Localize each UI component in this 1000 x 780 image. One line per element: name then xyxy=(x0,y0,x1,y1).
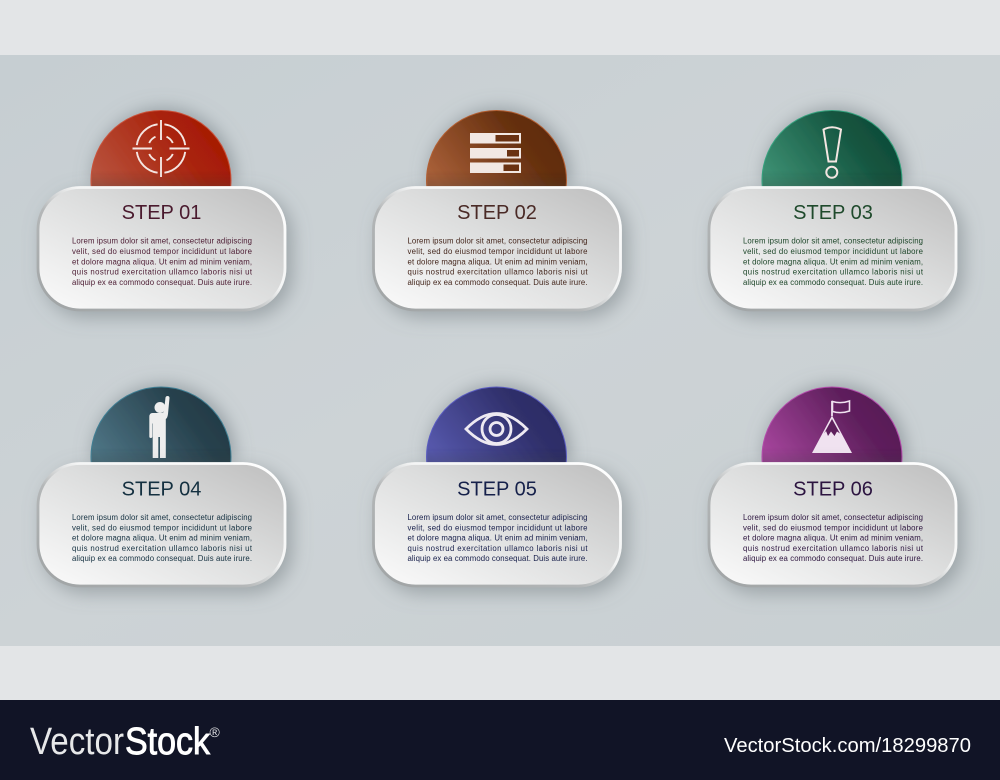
panel: step 02 xyxy=(374,111,620,310)
semicircle: step 02 xyxy=(426,111,566,187)
logo: VectorStock: Stock xyxy=(125,721,211,763)
text block: step 06: Lorem ipsum dolor sit amet, consectetur adipiscing xyxy=(743,513,923,522)
panel: step 04 xyxy=(38,387,285,586)
card: step 05 xyxy=(374,464,620,586)
panel: step 03 xyxy=(709,111,956,310)
icon: person raising arm xyxy=(149,396,170,458)
icon: exclamation mark xyxy=(824,127,841,178)
heading: step 01: STEP 01 xyxy=(122,202,201,224)
footer bar xyxy=(0,700,1000,780)
text block: step 01: Lorem ipsum dolor sit amet, consectetur adipiscing xyxy=(72,236,252,246)
text block: step 05: velit, sed do eiusmod tempor incididunt ut labore xyxy=(408,524,588,532)
text block: step 01 xyxy=(72,236,253,287)
heading: step 04: STEP 04 xyxy=(122,478,201,500)
heading: step 02: STEP 02 xyxy=(457,202,537,224)
semicircle: step 05 xyxy=(426,387,566,464)
text block: step 02 xyxy=(408,236,588,287)
text block: step 04: aliquip ex ea commodo consequat. Duis aute irure. xyxy=(72,554,252,563)
panel: step 05 xyxy=(374,387,620,586)
icon: mountain with flag xyxy=(812,401,852,453)
text block: step 03 xyxy=(743,236,924,287)
text block: step 03: et dolore magna aliqua. Ut enim ad minim veniam, xyxy=(743,258,923,266)
text block: step 04: quis nostrud exercitation ullamco laboris nisi ut xyxy=(72,544,253,553)
text block: step 05: Lorem ipsum dolor sit amet, consectetur adipiscing xyxy=(408,513,588,522)
text block: step 02: velit, sed do eiusmod tempor incididunt ut labore xyxy=(408,247,588,256)
card: step 02 xyxy=(374,188,620,310)
text block: step 06 xyxy=(743,513,924,563)
heading: step 03: STEP 03 xyxy=(793,202,873,224)
semicircle: step 04 xyxy=(91,387,231,464)
text block: step 02: Lorem ipsum dolor sit amet, consectetur adipiscing xyxy=(408,236,588,246)
text block: step 01: velit, sed do eiusmod tempor incididunt ut labore xyxy=(72,247,252,256)
text block: step 06: velit, sed do eiusmod tempor incididunt ut labore xyxy=(743,524,923,532)
text block: step 03: velit, sed do eiusmod tempor incididunt ut labore xyxy=(743,247,923,256)
icon: target xyxy=(132,120,190,177)
text block: step 06: quis nostrud exercitation ullamco laboris nisi ut xyxy=(743,544,924,553)
icon: progress bars xyxy=(470,133,521,173)
card: step 03 xyxy=(709,188,956,310)
text block: step 03: Lorem ipsum dolor sit amet, consectetur adipiscing xyxy=(743,236,923,246)
card: step 06 xyxy=(709,464,956,586)
heading: step 05: STEP 05 xyxy=(457,478,537,500)
logo: VectorStock xyxy=(30,721,220,763)
card: step 01 xyxy=(38,188,285,310)
text block: step 05: quis nostrud exercitation ullamco laboris nisi ut xyxy=(408,544,588,553)
text block: step 04: et dolore magna aliqua. Ut enim ad minim veniam, xyxy=(72,534,252,542)
heading: step 06: STEP 06 xyxy=(793,478,873,500)
image id: VectorStock.com/18299870: VectorStock.com/18299870 xyxy=(724,735,971,757)
text block: step 03: quis nostrud exercitation ullamco laboris nisi ut xyxy=(743,268,924,276)
text block: step 03: aliquip ex ea commodo consequat. Duis aute irure. xyxy=(743,278,923,287)
text block: step 06: aliquip ex ea commodo consequat. Duis aute irure. xyxy=(743,554,923,563)
text block: step 05: et dolore magna aliqua. Ut enim ad minim veniam, xyxy=(408,534,588,542)
text block: step 04: velit, sed do eiusmod tempor incididunt ut labore xyxy=(72,524,252,532)
text block: step 06: et dolore magna aliqua. Ut enim ad minim veniam, xyxy=(743,534,923,542)
text block: step 02: aliquip ex ea commodo consequat. Duis aute irure. xyxy=(408,278,588,287)
text block: step 04: Lorem ipsum dolor sit amet, consectetur adipiscing xyxy=(72,513,252,522)
text block: step 01: aliquip ex ea commodo consequat. Duis aute irure. xyxy=(72,278,252,287)
text block: step 05: aliquip ex ea commodo consequat. Duis aute irure. xyxy=(408,554,588,563)
text block: step 05 xyxy=(408,513,588,563)
text block: step 02: quis nostrud exercitation ullamco laboris nisi ut xyxy=(408,268,588,276)
semicircle: step 01 xyxy=(91,111,231,187)
text block: step 01: et dolore magna aliqua. Ut enim ad minim veniam, xyxy=(72,258,252,266)
logo: VectorStock: ® xyxy=(210,724,220,740)
logo: VectorStock: Vector xyxy=(30,721,124,763)
text block: step 04 xyxy=(72,513,253,563)
semicircle: step 03 xyxy=(762,111,902,187)
semicircle: step 06 xyxy=(762,387,902,464)
text block: step 01: quis nostrud exercitation ullamco laboris nisi ut xyxy=(72,268,253,276)
panel: step 01 xyxy=(38,111,285,310)
card: step 04 xyxy=(38,464,285,586)
icon: eye xyxy=(466,414,527,444)
text block: step 02: et dolore magna aliqua. Ut enim ad minim veniam, xyxy=(408,258,588,266)
panel: step 06 xyxy=(709,387,956,586)
